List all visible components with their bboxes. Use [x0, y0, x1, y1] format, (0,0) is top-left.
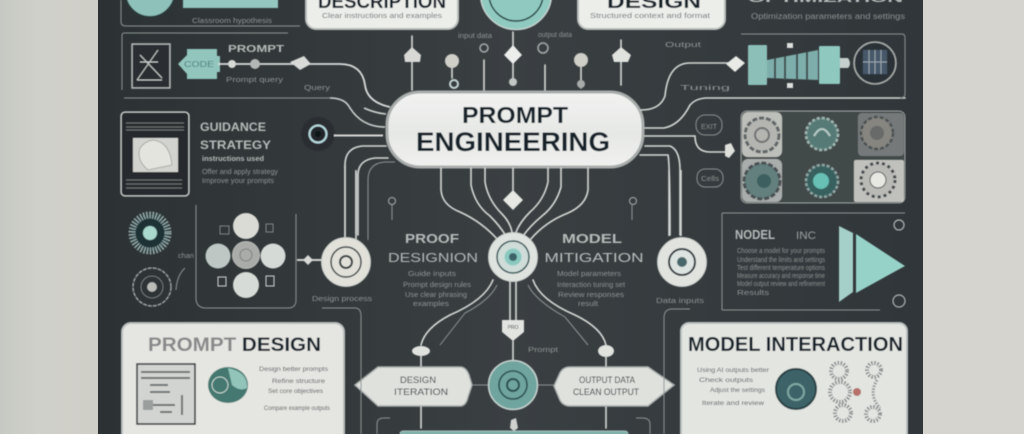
heading box: description	[306, 0, 458, 29]
panel: model tuning: Output	[665, 42, 701, 49]
panel: model info: Understand the limits and settings	[737, 257, 825, 264]
connector lines: left to pill	[345, 146, 395, 240]
heading box: design	[578, 0, 725, 29]
panel: model info: Measure accuracy and response time	[737, 273, 825, 280]
text block: model center: result	[578, 301, 598, 308]
text block: model center: MODEL	[562, 231, 622, 246]
text block: top right: Optimization parameters and settings	[751, 12, 905, 21]
icon: dark teal ring	[776, 369, 816, 409]
icon: teal tag: CODE	[184, 60, 214, 69]
labels: small pill captions right: Cells	[701, 176, 720, 183]
icon: eye node left	[301, 117, 383, 151]
panel: top left fragment	[121, 0, 300, 26]
icon: radial sun	[132, 215, 194, 260]
icon: crossed box	[132, 44, 170, 88]
panel: model info: INC	[796, 230, 816, 242]
text block: guidance: GUIDANCE	[200, 120, 266, 134]
text block: guidance: instructions used	[202, 154, 264, 163]
heading box: design: Structured context and format	[590, 13, 710, 20]
text block: guidance	[200, 120, 278, 185]
icon: radial sun: chan	[178, 253, 194, 260]
text block: guidance: Offer and apply strategy	[202, 169, 278, 176]
panel: prompt input: Prompt query	[226, 77, 284, 84]
icons: nodes above pill: input data	[458, 33, 492, 40]
arrow: prompt connector	[218, 56, 390, 127]
icon: sketched ring	[133, 268, 185, 306]
callout: left arrow label: ITERATION	[394, 387, 448, 397]
image: screen thumbnail	[137, 364, 195, 424]
text block: prompt design center: Use clear phrasing	[405, 292, 467, 299]
panel: prompt design	[122, 323, 344, 434]
panel: prompt design: PROMPT DESIGN	[148, 335, 321, 356]
panel: model info: Results	[737, 290, 770, 297]
panel: model info: Choose a model for your prompts	[737, 248, 825, 255]
panel: model interaction	[681, 323, 907, 434]
icon: teal blob	[208, 367, 248, 403]
connector lines: bottom	[322, 308, 690, 434]
panel: model interaction: Using AI outputs better	[697, 367, 770, 374]
node: left circle: Design process	[312, 296, 373, 303]
title pill: prompt engineering: PROMPT	[462, 102, 568, 128]
icon: teal circle	[125, 0, 175, 17]
panel: prompt design: Design better prompts	[259, 366, 329, 373]
callout: left arrow label	[355, 367, 472, 406]
heading box: description: Clear instructions and examples	[322, 13, 443, 20]
callout: right arrow label: OUTPUT DATA	[579, 375, 635, 385]
icon: top teal circle	[480, 0, 552, 30]
text block: top right	[748, 0, 905, 21]
text block: guidance: STRATEGY	[200, 138, 271, 152]
labels: small pill captions right: EXIT	[701, 124, 718, 131]
panel: model info: NODEL	[735, 227, 775, 242]
node: right circle	[656, 170, 706, 305]
icon: shield	[502, 320, 524, 341]
panel: model interaction: Adjust the settings	[710, 387, 766, 394]
connector lines: center node downward	[412, 280, 614, 367]
panel: guidance image	[121, 112, 189, 196]
panel: prompt design: Compare example outputs	[264, 405, 331, 412]
icon: shield: PRO	[508, 325, 519, 331]
title pill: prompt engineering: ENGINEERING	[416, 127, 610, 157]
text block: prompt design center	[388, 231, 478, 308]
node: right circle: Data inputs	[656, 298, 705, 305]
panel: six image tiles	[741, 111, 905, 203]
panel: model interaction: Iterate and review	[702, 400, 764, 407]
callout: left arrow label: DESIGN	[400, 375, 436, 385]
icons: nodes above pill: output data	[538, 32, 572, 39]
icon: teal equalizer	[748, 43, 850, 88]
connector lines: pill to center node	[388, 168, 636, 240]
panel: model interaction: MODEL INTERACTION	[688, 334, 903, 356]
icon: teal play triangles	[839, 226, 905, 302]
panel: prompt input: PROMPT	[228, 44, 284, 55]
text block: model center: Interaction tuning set	[557, 282, 625, 289]
text block: prompt design center: PROOF	[405, 231, 459, 246]
text block: model center: Review responses	[558, 292, 625, 299]
panel: prompt design: Set core objectives	[268, 388, 324, 395]
panel: prompt input: Query	[304, 85, 331, 92]
node: center circle	[488, 232, 538, 282]
text block: prompt design center: DESIGNION	[388, 250, 478, 265]
icon: stippled clusters	[830, 363, 881, 421]
panel: top left fragment: Classroom hypothesis	[192, 18, 273, 25]
labels: small pill captions right	[696, 115, 723, 187]
panel: prompt input	[122, 33, 331, 98]
text block: prompt design center: Guide inputs	[408, 271, 457, 278]
text block: model center	[544, 231, 644, 308]
arrow: cluster to left node	[297, 255, 322, 265]
panel: model tuning: Tuning	[680, 85, 730, 92]
title pill: prompt engineering	[387, 92, 643, 167]
bottom teal bar	[400, 431, 628, 434]
node: left circle	[312, 165, 373, 303]
text block: prompt design center: Prompt design rules	[403, 282, 472, 289]
icon: lens ring	[854, 42, 896, 84]
panel: model interaction: Check outputs	[699, 377, 754, 384]
text block: guidance: Improve your prompts	[202, 178, 275, 185]
connector lines: pill to right	[640, 56, 905, 235]
panel: model info: Test different temperature options	[737, 265, 825, 272]
panel: model info	[722, 213, 905, 310]
callout: right arrow label	[554, 367, 674, 406]
panel: model info: Model output review and refinement	[737, 281, 825, 288]
panel: five dot cluster	[196, 205, 296, 308]
panel: model tuning	[665, 34, 905, 98]
text block: model center: MITIGATION	[544, 250, 644, 265]
callout: right arrow label: CLEAN OUTPUT	[573, 387, 639, 397]
text block: model center: Model parameters	[557, 271, 622, 278]
panel: prompt design: Refine structure	[272, 378, 325, 385]
icons: nodes above pill	[404, 32, 631, 90]
node: teal circle	[472, 360, 554, 410]
icon: teal tag	[178, 49, 220, 79]
connector lines: center node downward: Prompt	[528, 347, 558, 354]
text block: prompt design center: examples	[413, 301, 450, 308]
